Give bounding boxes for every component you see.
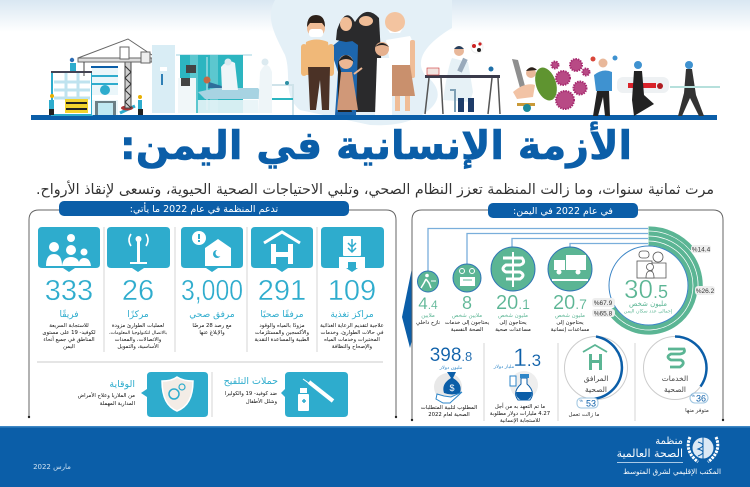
stat: humanitarian assistance: يحتاجون إلى [556, 320, 584, 326]
stat: 398.8 million dollars: مليون دولار [439, 365, 463, 371]
stat: health assistance: يحتاجون إلى [499, 320, 527, 326]
card: emergency operations centres: الأساسية، والتمويل [117, 343, 159, 350]
illustration: shield fighting viruses [512, 59, 590, 112]
icon: family outline [637, 251, 666, 278]
stat: health assistance [491, 247, 535, 333]
card: nutrition centres: والإصحاح والنظافة [332, 344, 373, 350]
icon: person walking [418, 271, 438, 292]
card: health facilities supplied: الطبية والمساعدة النقدية [254, 337, 310, 343]
stat: health assistance: مساعدات صحية [495, 327, 531, 333]
stat: humanitarian assistance [548, 247, 592, 333]
icon: hospital H [264, 232, 300, 264]
subtitle: مرت ثمانية سنوات، وما زالت المنظمة تعزز النظام الصحي، وتلبي الاحتياجات الصحية الحيوية، وتسعى لإنقاذ الأرواح. [36, 180, 714, 198]
card: nutrition centres: 109 [328, 275, 376, 307]
old man [385, 12, 415, 111]
stat: mental health [445, 264, 490, 333]
illustration: crane [78, 39, 152, 108]
card: response teams: المناطق في جميع أنحاء [43, 335, 95, 343]
icon: glasses and book [453, 264, 481, 292]
card: health facility surveillance: 3,000 [181, 275, 243, 307]
stat: humanitarian assistance: 20.7 [553, 292, 587, 314]
card: response teams: للاستجابة السريعة [49, 323, 89, 329]
badge: 65 percent [592, 309, 615, 318]
stat: mental health: يحتاجون إلى خدمات [445, 320, 490, 326]
illustration: hospital under construction [49, 58, 143, 115]
stat: internally displaced: 4.4 [418, 294, 438, 313]
card: emergency operations centres: والاتصالات، والمعدات [115, 337, 162, 343]
card: health facility surveillance: مرفق صحي [189, 310, 235, 320]
chart: population ring gauge [610, 228, 701, 333]
gauge: health facilities 53: المرافق [584, 374, 608, 383]
card: vaccination campaigns: حملات التلقيح [224, 376, 278, 387]
panel heading [59, 201, 349, 216]
boy [375, 42, 392, 115]
card: response teams: 333 [45, 275, 93, 307]
stat: 1.3 billion dollars: 4.27 مليارات دولار مطلوبة [490, 411, 550, 417]
card: nutrition centres [320, 227, 384, 350]
panel: WHO support in 2022 [28, 201, 397, 418]
card: nutrition centres: علاجية لتقديم الرعاية الغذائية [320, 323, 384, 329]
card: nutrition centres: في حالات الطوارئ، وخدمات [320, 330, 384, 336]
badge: 14 percent: %14.4 [692, 246, 711, 254]
stat: internally displaced: نازح داخلي [416, 320, 441, 326]
title: الأزمة الإنسانية في اليمن: [120, 121, 632, 169]
badge: 53 percent [577, 398, 598, 408]
badge: 53 percent: 53 [586, 398, 596, 408]
card: response teams: لكوفيد- 19 على مستوى [42, 329, 96, 336]
card: emergency operations centres: بالاتصال لتكنولوجيا المعلومات، [109, 330, 167, 336]
card: health facility surveillance [181, 227, 243, 336]
card: health facility surveillance: والإبلاغ عنها [199, 330, 225, 336]
WHO name: منظمة [655, 436, 683, 447]
card: prevention: من الملاريا وعلاج الأمراض [78, 392, 135, 399]
stat: humanitarian assistance: مليون شخص [555, 313, 585, 319]
illustration: scientist at lab bench [425, 41, 500, 114]
card: response teams: فريقًا [59, 309, 79, 320]
card: prevention [78, 372, 208, 417]
stat: health assistance: 20.1 [496, 292, 530, 314]
badge: 36 percent: 36 [696, 394, 706, 404]
circle: total population: إجمالي عدد سكان اليمن [624, 308, 673, 314]
badge: 36 percent: % [691, 393, 695, 398]
ground bar [31, 115, 717, 120]
gauge: health facilities 53 [564, 336, 628, 418]
stat: 1.3 billion dollars: 1.3 [513, 344, 541, 372]
icon: wheat silo [339, 236, 365, 268]
stat: 398.8 million dollars: 398.8 [430, 345, 472, 366]
icon: green staff [668, 349, 684, 367]
stat: 1.3 billion dollars: للاستجابة الإنسانية [500, 418, 540, 424]
icon: WHO emblem [688, 436, 718, 462]
elder woman in black [350, 12, 384, 112]
stat: 398.8 million dollars: المطلوب لتلبية المتطلبات [421, 405, 477, 411]
WHO name [617, 436, 721, 476]
stat: internally displaced [416, 271, 441, 326]
badge: 36 percent [690, 393, 708, 404]
badge: 26 percent: %26.2 [696, 288, 715, 295]
panel: Yemen in 2022 [411, 203, 724, 424]
WHO name: الصحة العالمية [617, 447, 683, 460]
icon: syringe and vial [298, 379, 333, 411]
gauge: health facilities 53: الصحية [585, 385, 607, 394]
panel heading: تدعم المنظمة في عام 2022 ما يأتي: [130, 202, 279, 215]
circle: total population [609, 246, 688, 325]
card: health facilities supplied: والأكسجين والمستلزمات [255, 329, 310, 336]
gauge: health services 36: متوفر منها [685, 408, 709, 414]
stat: 1.3 billion dollars: ما تم التعهد به من أجل [495, 402, 545, 410]
girl [337, 55, 362, 110]
illustration: family [301, 12, 415, 115]
stat: humanitarian assistance: مساعدات إنسانية [551, 327, 589, 333]
card: nutrition centres: مراكز تغذية [330, 310, 374, 320]
card: emergency operations centres: لعمليات الطوارئ مزودة [112, 323, 165, 329]
card: emergency operations centres: 26 [122, 275, 154, 307]
stat: 1.3 billion dollars: مليار دولار [493, 364, 515, 370]
badge: 53 percent: % [579, 398, 583, 403]
arrow between panels [402, 268, 412, 348]
card: health facilities supplied: مرفقًا صحيًا [260, 309, 304, 320]
card: vaccination campaigns: ضد كوفيد- 19 والكوليرا [225, 390, 277, 397]
icon: shield with virus [162, 377, 193, 411]
badge: 67 percent: %67.9 [594, 300, 613, 307]
illustration: people carrying thermometer [590, 56, 720, 116]
panel heading: في عام 2022 في اليمن: [513, 206, 613, 217]
connector lines [428, 228, 648, 271]
card: health facilities supplied [251, 227, 313, 343]
WHO name: المكتب الإقليمي لشرق المتوسط [623, 467, 721, 476]
footer band [0, 426, 750, 487]
icon: medical team [46, 234, 91, 266]
circle: total population: مليون شخص [629, 300, 667, 308]
man with mask [301, 15, 334, 110]
icon: antenna [129, 234, 148, 264]
stat: health assistance: مليون شخص [498, 313, 528, 319]
card: health facilities supplied: مزودًا بالمياه والوقود [259, 323, 305, 329]
gauge: health services 36: الصحية [664, 385, 686, 394]
icon: truck [548, 247, 592, 291]
card: vaccination campaigns [224, 372, 348, 417]
stat: 1.3 billion dollars [490, 344, 550, 424]
stat: 398.8 million dollars [421, 345, 477, 418]
gauge: health facilities 53: ما زالت تعمل [569, 412, 600, 418]
icon: green H house [583, 345, 607, 370]
stat: internally displaced: ملايين [421, 313, 435, 319]
illustration: hospital room with patient [152, 45, 293, 115]
stat: mental health: ملايين شخص [452, 313, 482, 319]
card: prevention: الوقاية [109, 379, 135, 390]
card: health facility surveillance: مع رصد 28 مرضًا [192, 323, 232, 329]
badge: 65 percent: %65.8 [594, 310, 613, 318]
card: response teams [38, 227, 100, 350]
gauge: health services 36 [644, 336, 709, 414]
stat: mental health: الصحة النفسية [451, 327, 483, 333]
woman in blue [330, 15, 360, 115]
gauge: health services 36: الخدمات [662, 374, 688, 383]
circle: total population: 30.5 [624, 274, 668, 304]
card: health facilities supplied: 291 [258, 275, 306, 307]
stat: 398.8 million dollars: الصحية لعام 2022 [428, 412, 470, 418]
card: response teams: اليمن [63, 344, 75, 350]
card: emergency operations centres [107, 227, 170, 350]
card: emergency operations centres: مركزًا [127, 310, 149, 320]
panel heading [488, 203, 638, 218]
card: prevention: المدارية المهملة [100, 401, 135, 407]
card: vaccination campaigns: وشلل الأطفال [246, 398, 277, 405]
icon: money flask [510, 371, 538, 400]
header illustration band [0, 0, 750, 125]
icon: alert house [192, 231, 231, 266]
icon: money bag in hand: $ [449, 383, 455, 393]
stat: mental health: 8 [462, 293, 472, 313]
icon: staff of Asclepius [491, 247, 535, 291]
badge: 67 percent [592, 298, 615, 307]
card: nutrition centres: المختبرات وخدمات المياه [324, 337, 380, 343]
date: مارس 2022 [33, 463, 71, 471]
